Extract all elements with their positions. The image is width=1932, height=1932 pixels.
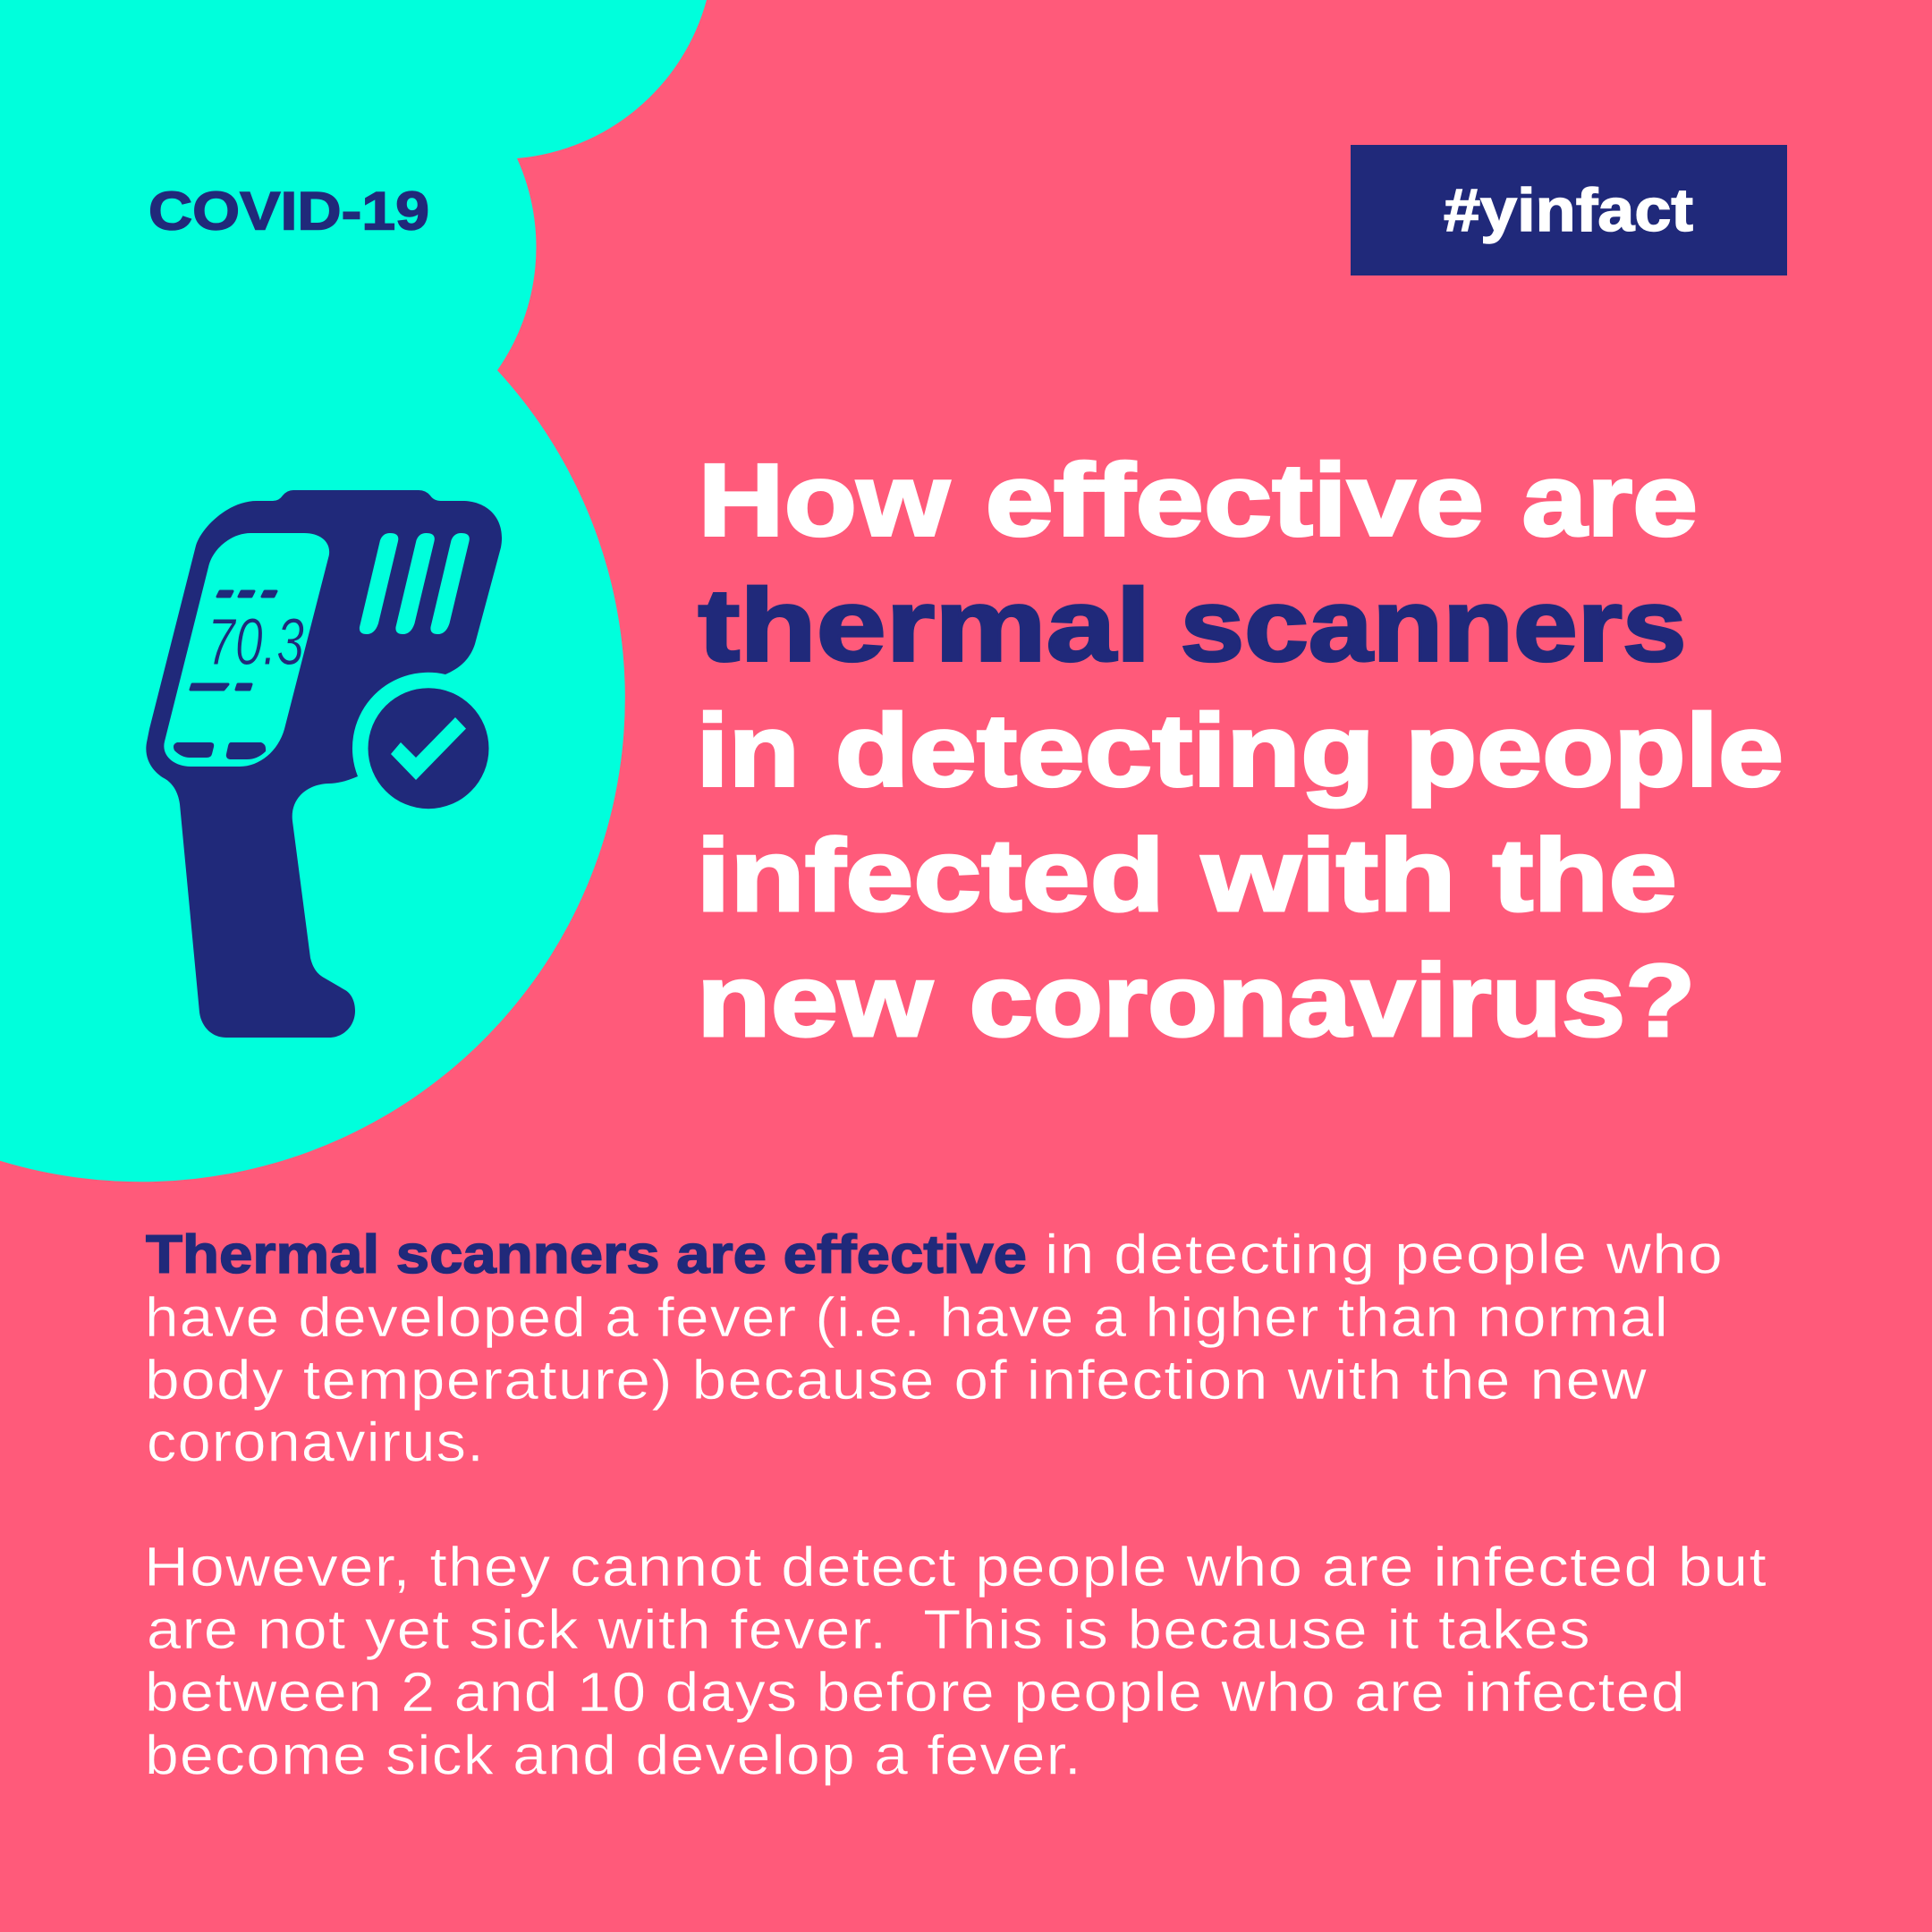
screen buttons <box>174 742 266 759</box>
paragraph 1: in detecting people who <box>1045 1224 1724 1286</box>
label: COVID-19: COVID-19 <box>148 181 429 242</box>
cyan blob shape <box>0 0 707 1182</box>
screen lower indicator bars <box>191 684 251 690</box>
paragraph 1: body temperature) because of infection with the new <box>145 1350 1648 1411</box>
headline: in <box>696 694 800 809</box>
headline: are <box>1522 444 1698 558</box>
headline: How <box>698 444 950 558</box>
paragraph 2: However, they cannot detect people who are infected but <box>144 1537 1767 1598</box>
paragraph 2 <box>144 1537 1767 1787</box>
headline: effective <box>986 444 1484 558</box>
paragraph 1: Thermal scanners are effective <box>146 1224 1027 1284</box>
tag: #yinfact: #yinfact <box>1444 176 1693 244</box>
headline: infected <box>696 818 1165 933</box>
paragraph 2: between 2 and 10 days before people who are infected <box>145 1662 1686 1724</box>
paragraph 1 <box>145 1224 1724 1474</box>
paragraph 2: are not yet sick with fever. This is because it takes <box>147 1599 1591 1661</box>
screen top indicator bars <box>217 591 276 597</box>
headline: detecting <box>835 694 1375 809</box>
headline: scanners <box>1181 569 1687 683</box>
headline: coronavirus? <box>970 944 1696 1058</box>
headline: thermal <box>698 569 1150 683</box>
headline <box>696 444 1784 1058</box>
paragraph 1: coronavirus. <box>147 1411 485 1474</box>
temperature reading: 70.3 <box>208 605 304 679</box>
paragraph 2: become sick and develop a fever. <box>145 1724 1082 1787</box>
paragraph 1: have developed a fever (i.e. have a higher than normal <box>145 1287 1669 1349</box>
vent slots <box>360 533 470 634</box>
headline: people <box>1405 694 1784 809</box>
headline: with <box>1200 818 1456 933</box>
scanner body <box>146 490 502 1038</box>
check badge <box>369 688 488 809</box>
scanner screen <box>164 533 329 767</box>
headline: new <box>697 944 933 1058</box>
icon: thermal scanner with check mark <box>146 490 502 1038</box>
check mark <box>391 717 466 780</box>
headline: the <box>1492 818 1677 933</box>
tag: #yinfact <box>1351 145 1787 275</box>
